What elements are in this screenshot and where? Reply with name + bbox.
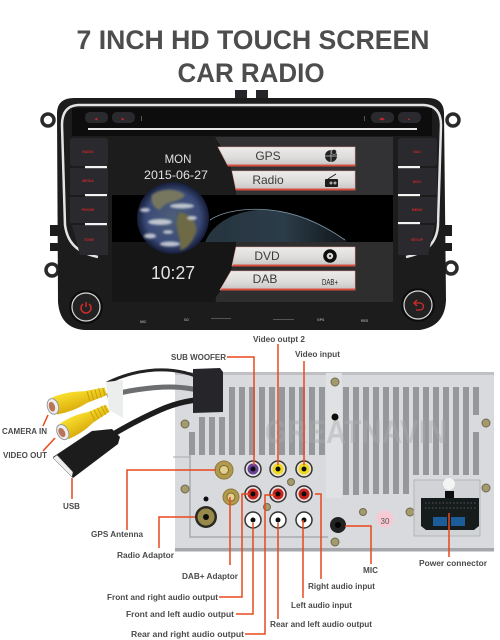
top panel with disc slot: ◀▶: [378, 117, 386, 121]
silver trim: [62, 105, 441, 257]
title: [76, 25, 430, 88]
watermark: GREATNAVIN: [265, 414, 447, 450]
top panel with disc slot: ▲: [407, 117, 411, 121]
thick black cable: [112, 399, 212, 435]
connector labels: Rear and right audio output: [131, 630, 244, 639]
head unit: [42, 90, 459, 330]
button: GPS: [218, 147, 355, 166]
icon: disc: [325, 251, 335, 261]
leader lines: [43, 344, 449, 634]
cables and plugs: [45, 368, 223, 478]
title: CAR RADIO: [178, 58, 324, 88]
radio body: [57, 98, 446, 330]
connector labels: Video input: [295, 350, 340, 359]
button: Radio: Radio: [252, 173, 284, 187]
icon: radio: [325, 174, 338, 187]
vent slots: [189, 387, 479, 495]
button: DVD: DVD: [254, 249, 280, 263]
button: Radio: [232, 171, 355, 190]
bottom strip labels: MIC: [140, 320, 147, 324]
mounting tabs and ears: [42, 90, 459, 276]
left side buttons: PHONE: [82, 208, 95, 212]
connector labels: Right audio input: [308, 582, 375, 591]
earth globe: [137, 182, 209, 254]
left side buttons: [70, 138, 108, 255]
connector labels: CAMERA IN: [2, 427, 47, 436]
connector labels: Front and left audio output: [126, 610, 234, 619]
connector labels: Power connector: [419, 559, 487, 568]
connector labels: [2, 335, 487, 639]
connector labels: MIC: [363, 566, 378, 575]
date and time: MON: [165, 154, 191, 166]
rear panel: [173, 372, 494, 552]
icon: globe: [325, 150, 337, 162]
left side buttons: TONE: [84, 238, 95, 242]
date and time: 10:27: [151, 263, 195, 283]
top panel with disc slot: [72, 108, 432, 136]
top panel with disc slot: ▶: [121, 117, 126, 121]
radio adaptor socket: [195, 496, 217, 528]
sticker: 30: [381, 517, 390, 526]
bottom strip labels: GPS: [317, 318, 325, 322]
right side buttons: MENU: [412, 208, 423, 212]
bottom strip labels: SD: [184, 318, 189, 322]
sticker: [376, 510, 394, 528]
power knob: [69, 290, 103, 324]
touch screen: [112, 137, 393, 302]
connector labels: Front and right audio output: [107, 593, 218, 602]
connector labels: Video outpt 2: [253, 335, 306, 344]
yellow RCA plug: camera in: [45, 382, 108, 417]
MIC socket: [330, 517, 346, 533]
left side buttons: MEDIA: [82, 179, 94, 183]
button: DVD: [232, 247, 355, 266]
thin black cable: [107, 370, 210, 384]
planet horizon: [205, 210, 348, 242]
yellow RCA plug: video out: [54, 400, 112, 443]
connector labels: SUB WOOFER: [171, 353, 226, 362]
left side buttons: RADIO: [82, 150, 94, 154]
button: DAB: [220, 271, 355, 290]
date and time: 2015-06-27: [144, 168, 208, 182]
RCA sockets: [245, 461, 312, 528]
connector labels: GPS Antenna: [91, 530, 144, 539]
button: GPS: GPS: [255, 149, 281, 163]
connector labels: Radio Adaptor: [117, 551, 174, 560]
GPS antenna connector: [215, 461, 233, 479]
icon: DAB+: DAB+: [322, 278, 338, 287]
right side buttons: DISC: [413, 180, 422, 184]
top panel with disc slot: ◀: [94, 117, 99, 121]
bottom strip labels: RES: [361, 319, 369, 323]
date and time: [144, 154, 208, 283]
connector labels: USB: [63, 502, 80, 511]
title: 7 INCH HD TOUCH SCREEN: [76, 25, 430, 55]
boot: [193, 368, 223, 413]
cable labels: [106, 380, 123, 418]
DAB connector: [223, 489, 239, 505]
bottom strip labels: [140, 318, 369, 324]
connector labels: DAB+ Adaptor: [182, 572, 238, 581]
connector labels: Left audio input: [291, 601, 352, 610]
power connector: [414, 478, 480, 536]
right side buttons: [398, 138, 437, 255]
USB plug: [53, 429, 120, 478]
screws: [181, 378, 490, 546]
right side buttons: SETUP: [411, 238, 424, 242]
right side buttons: NAV: [413, 150, 421, 154]
button: DAB: DAB: [253, 272, 277, 286]
gray cable: [107, 387, 210, 396]
connector labels: Rear and left audio output: [270, 620, 372, 629]
connector labels: VIDEO OUT: [3, 451, 47, 460]
back knob: [401, 288, 435, 322]
